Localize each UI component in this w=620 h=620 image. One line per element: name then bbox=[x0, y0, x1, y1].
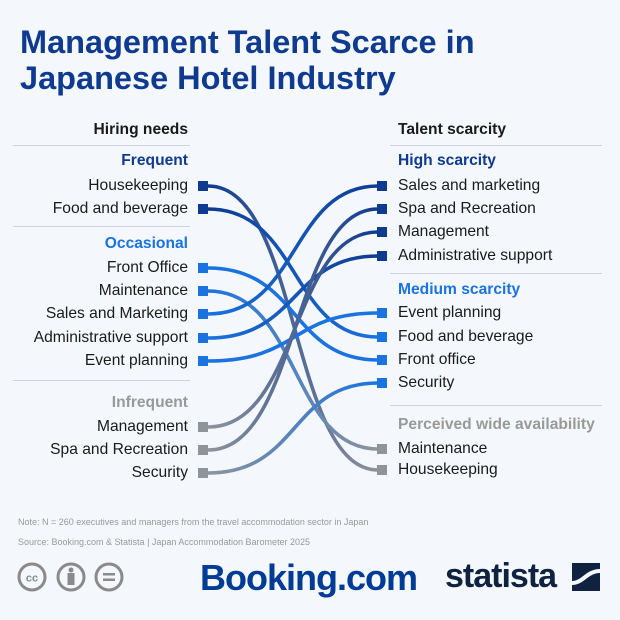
source: Source: Booking.com & Statista | Japan Accommodation Barometer 2025 bbox=[18, 537, 310, 547]
right labels: Administrative support bbox=[398, 247, 552, 264]
right labels: Front office bbox=[398, 351, 476, 368]
right column header: Talent scarcity bbox=[398, 121, 506, 138]
left labels: Spa and Recreation bbox=[50, 441, 188, 458]
left labels: Infrequent bbox=[112, 394, 188, 411]
title: Japanese Hotel Industry bbox=[20, 60, 396, 96]
left column header: Hiring needs bbox=[94, 121, 188, 138]
right labels: Food and beverage bbox=[398, 328, 533, 345]
left labels: Sales and Marketing bbox=[46, 305, 188, 322]
right labels: Maintenance bbox=[398, 440, 487, 457]
left labels bbox=[34, 152, 188, 481]
left labels: Housekeeping bbox=[88, 177, 188, 194]
logo: statista: statista bbox=[445, 557, 556, 595]
right labels: Sales and marketing bbox=[398, 177, 540, 194]
right labels bbox=[398, 152, 595, 478]
icons: creative commons bbox=[18, 562, 124, 592]
logo: Booking.com: Booking.com bbox=[200, 557, 417, 598]
left labels: Food and beverage bbox=[53, 200, 188, 217]
right labels: Management bbox=[398, 223, 489, 240]
title bbox=[20, 24, 475, 96]
left labels: Occasional bbox=[105, 235, 188, 252]
left labels: Security bbox=[132, 464, 188, 481]
left labels: Event planning bbox=[85, 352, 188, 369]
right labels: Security bbox=[398, 374, 454, 391]
right labels: Perceived wide availability bbox=[398, 416, 595, 433]
right labels: Event planning bbox=[398, 304, 501, 321]
left labels: Frequent bbox=[121, 152, 188, 169]
title: Management Talent Scarce in bbox=[20, 24, 475, 60]
right labels: Housekeeping bbox=[398, 461, 498, 478]
right labels: High scarcity bbox=[398, 152, 496, 169]
note: Note: N = 260 executives and managers from the travel accommodation sector in Japan bbox=[18, 517, 368, 527]
left labels: Management bbox=[97, 418, 188, 435]
icons: creative commons: cc bbox=[26, 572, 38, 584]
right labels: Medium scarcity bbox=[398, 281, 520, 298]
left labels: Administrative support bbox=[34, 329, 188, 346]
left labels: Maintenance bbox=[99, 282, 188, 299]
right labels: Spa and Recreation bbox=[398, 200, 536, 217]
left labels: Front Office bbox=[107, 259, 188, 276]
